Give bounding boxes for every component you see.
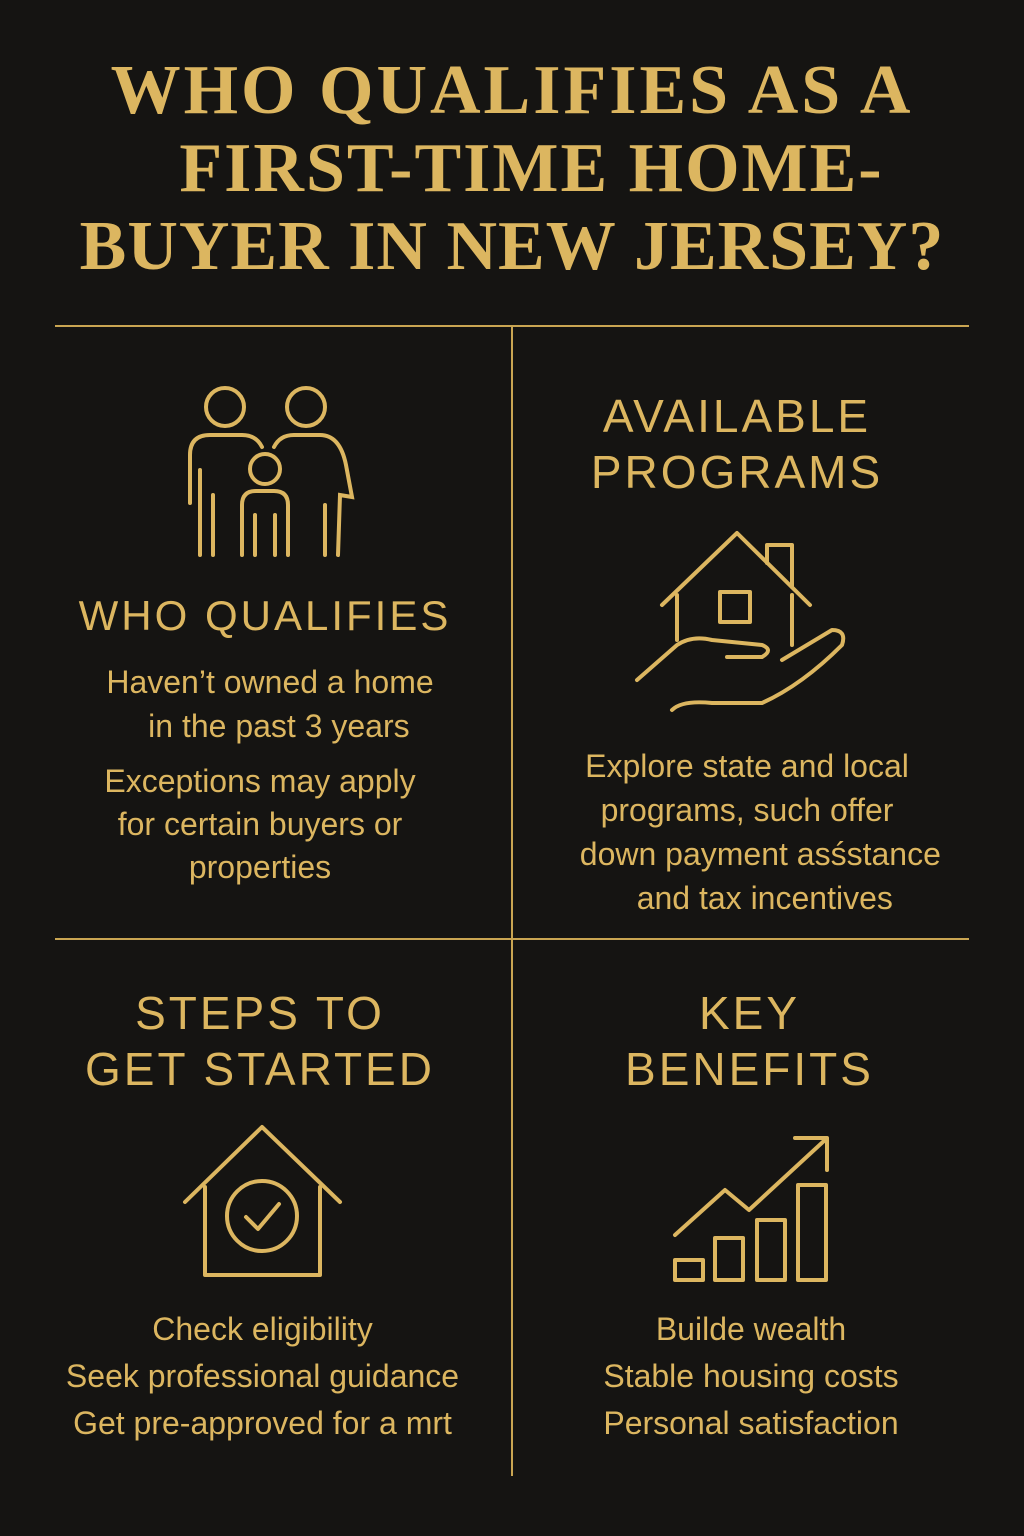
- panel: who qualifies: properties: [189, 849, 331, 885]
- icon: house check: [182, 1124, 342, 1277]
- text: down payment asśstance: [580, 836, 941, 872]
- icon: growth chart: [672, 1136, 829, 1282]
- icon: family: [188, 386, 354, 557]
- panel: who qualifies: [78, 386, 451, 885]
- title: FIRST-TIME HOME-: [179, 130, 884, 207]
- heading: BENEFITS: [625, 1043, 874, 1095]
- text: Explore state and local: [585, 748, 909, 784]
- text: and tax incentives: [637, 880, 893, 916]
- heading: GET STARTED: [85, 1043, 435, 1095]
- text: Builde wealth: [656, 1311, 846, 1347]
- heading: WHO QUALIFIES: [79, 592, 451, 639]
- text: Seek professional guidance: [66, 1358, 459, 1394]
- title: [80, 52, 944, 285]
- text: [580, 748, 941, 916]
- text: in the past 3 years: [148, 708, 410, 744]
- heading: PROGRAMS: [591, 446, 883, 498]
- text: [106, 664, 434, 744]
- heading: [85, 987, 435, 1095]
- icon: house in hand: [634, 530, 846, 712]
- text: Get pre-approved for a mrt: [73, 1405, 452, 1441]
- heading: [625, 987, 874, 1095]
- panel: key benefits: [603, 987, 899, 1441]
- text: [603, 1311, 899, 1441]
- title: BUYER IN NEW JERSEY?: [80, 208, 944, 285]
- title: WHO QUALIFIES AS A: [111, 52, 913, 129]
- panel: who qualifies: for certain buyers or: [118, 806, 402, 842]
- text: Haven’t owned a home: [106, 664, 434, 700]
- heading: STEPS TO: [135, 987, 385, 1039]
- panel: steps: [66, 987, 459, 1441]
- heading: [591, 390, 883, 498]
- panel: who qualifies: Exceptions may apply: [104, 763, 416, 799]
- panel: available programs: [580, 390, 941, 916]
- text: Personal satisfaction: [603, 1405, 899, 1441]
- text: [66, 1311, 459, 1441]
- text: programs, such offer: [601, 792, 893, 828]
- heading: AVAILABLE: [603, 390, 871, 442]
- text: Check eligibility: [152, 1311, 373, 1347]
- text: Stable housing costs: [603, 1358, 899, 1394]
- heading: KEY: [699, 987, 800, 1039]
